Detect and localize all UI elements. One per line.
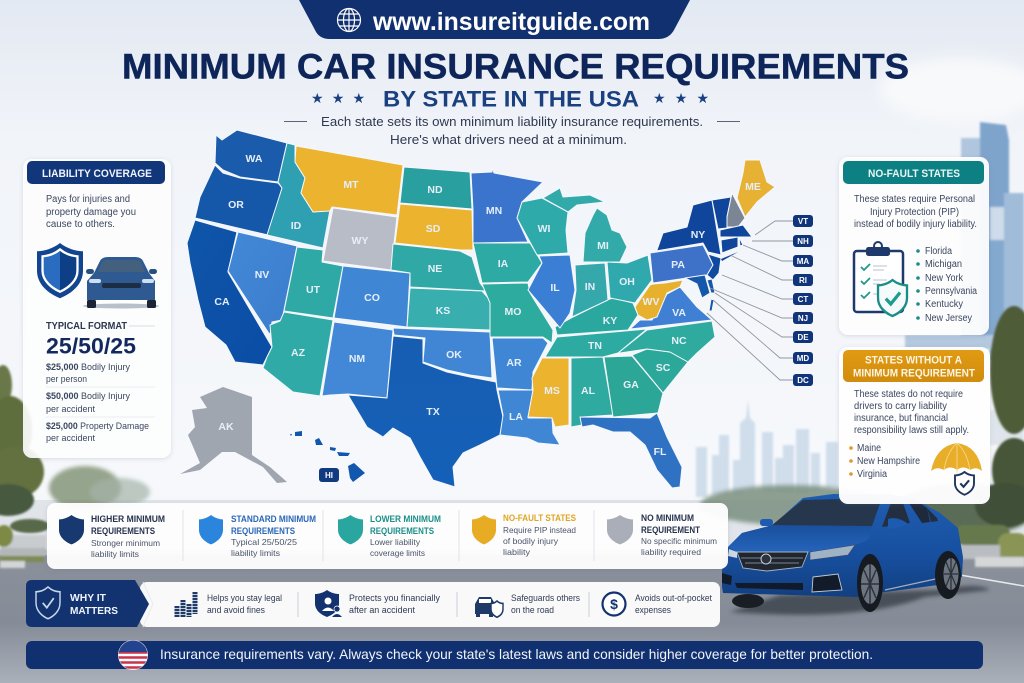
why it matters tab: WHY IT bbox=[70, 592, 107, 604]
state: Pennsylvania bbox=[650, 245, 713, 283]
description: Pays for injuries and bbox=[46, 194, 130, 205]
state: Arkansas bbox=[492, 338, 548, 390]
state: Wisconsin bbox=[517, 198, 568, 255]
state: Montana: MT bbox=[343, 179, 359, 191]
legend: no minimum: No specific minimum bbox=[641, 536, 717, 546]
state: Arizona: AZ bbox=[291, 347, 306, 359]
icon: shield bbox=[37, 243, 83, 298]
legend: lower minimum: LOWER MINIMUM bbox=[370, 514, 441, 524]
legend: higher minimum: Stronger minimum bbox=[91, 538, 160, 548]
legend: no-fault states bbox=[472, 513, 576, 557]
legend: no-fault states: Require PIP instead bbox=[503, 525, 576, 535]
list of no-fault states: New York bbox=[925, 273, 964, 284]
state: Kansas: KS bbox=[436, 305, 450, 317]
list of no-fault states bbox=[916, 246, 977, 324]
icon: car front bbox=[83, 257, 159, 308]
icon: clipboard with shield bbox=[854, 242, 907, 316]
state: Virginia bbox=[630, 287, 712, 329]
state: Arizona bbox=[263, 312, 333, 396]
state: Maryland and Delaware bbox=[685, 275, 715, 311]
list of no-fault states: New Jersey bbox=[925, 313, 972, 324]
benefit: stay legal bbox=[177, 592, 282, 617]
state: Alaska: AK bbox=[218, 421, 234, 433]
coverage amounts: $25,000 Bodily Injury bbox=[46, 362, 130, 373]
coverage amounts: $50,000 Bodily Injury bbox=[46, 391, 130, 402]
northeast state callout labels bbox=[707, 215, 813, 386]
state: Louisiana bbox=[498, 390, 560, 445]
northeast state callout labels: DC bbox=[797, 376, 809, 385]
state: Florida bbox=[580, 413, 682, 488]
state: West Virginia bbox=[635, 280, 683, 320]
northeast state callout labels: MD bbox=[797, 354, 809, 363]
legend: no minimum: NO MINIMUM bbox=[641, 513, 694, 523]
state: Idaho: ID bbox=[291, 220, 302, 232]
state: New Mexico bbox=[322, 322, 393, 398]
bottom note bar bbox=[26, 640, 983, 670]
typical format heading: TYPICAL FORMAT bbox=[46, 320, 128, 332]
list of no-fault states: Pennsylvania bbox=[925, 286, 977, 297]
description: instead of bodily injury liability. bbox=[854, 219, 977, 230]
state: Colorado bbox=[334, 266, 410, 327]
panel: why it matters bbox=[26, 580, 720, 627]
legend: standard minimum: liability limits bbox=[231, 548, 280, 558]
bottom note bar: Insurance requirements vary. Always check your state's latest laws and consider higher coverage for better protection. bbox=[160, 646, 873, 662]
state: Vermont bbox=[712, 197, 731, 229]
state: Iowa bbox=[473, 243, 542, 283]
panel heading: STATES WITHOUT A bbox=[865, 354, 962, 366]
state: Arkansas: AR bbox=[506, 357, 522, 369]
description: These states require Personal bbox=[854, 194, 975, 205]
northeast state callout labels: NJ bbox=[798, 314, 808, 323]
state: Mississippi: MS bbox=[544, 385, 560, 397]
state: Wisconsin: WI bbox=[538, 223, 550, 235]
state: Minnesota: MN bbox=[486, 205, 502, 217]
state: North Dakota: ND bbox=[427, 184, 443, 196]
why it matters tab bbox=[26, 580, 153, 627]
state: Washington bbox=[215, 130, 287, 182]
northeast state callout labels: MA bbox=[797, 257, 809, 266]
state: Washington: WA bbox=[246, 153, 263, 165]
state: Kansas bbox=[407, 288, 490, 330]
benefit: financial protection: after an accident bbox=[349, 605, 415, 615]
state: Illinois: IL bbox=[550, 282, 560, 294]
benefit: out-of-pocket: expenses bbox=[635, 605, 671, 615]
state: Nevada bbox=[228, 232, 297, 335]
panel: map legend bbox=[47, 503, 728, 569]
panel heading bbox=[27, 161, 165, 184]
state: Missouri bbox=[482, 283, 553, 343]
benefit: financial protection bbox=[315, 590, 440, 617]
state: Georgia: GA bbox=[623, 379, 639, 391]
legend: standard minimum: STANDARD MINIMUM bbox=[231, 514, 316, 524]
state: Rhode Island bbox=[739, 237, 743, 246]
why it matters tab: MATTERS bbox=[70, 605, 118, 617]
state: Utah: UT bbox=[306, 284, 321, 296]
benefit: stay legal: and avoid fines bbox=[207, 605, 265, 615]
description: property damage you bbox=[46, 207, 136, 218]
legend: higher minimum: HIGHER MINIMUM bbox=[91, 514, 165, 524]
panel heading bbox=[843, 350, 984, 382]
state: California bbox=[187, 220, 272, 365]
legend: standard minimum bbox=[199, 514, 316, 558]
icon: US flag bbox=[118, 640, 148, 670]
title: MINIMUM CAR INSURANCE REQUIREMENTS bbox=[122, 48, 909, 86]
coverage amounts: per accident bbox=[46, 433, 95, 444]
state: Nevada: NV bbox=[255, 269, 269, 281]
coverage amounts bbox=[46, 362, 155, 444]
state: Florida: FL bbox=[654, 446, 667, 458]
description: cause to others. bbox=[46, 219, 115, 230]
state: Massachusetts bbox=[720, 225, 752, 237]
state: Kentucky bbox=[555, 298, 638, 335]
panel heading bbox=[843, 161, 984, 184]
subtitle with stars: ★★★ bbox=[311, 90, 365, 106]
state: Ohio: OH bbox=[619, 276, 635, 288]
state: Minnesota bbox=[471, 167, 543, 243]
subtitle with stars: BY STATE IN THE USA bbox=[383, 86, 639, 112]
state: Maine: ME bbox=[745, 181, 761, 193]
panel heading: MINIMUM REQUIREMENT bbox=[853, 368, 975, 380]
state: Oklahoma bbox=[393, 328, 492, 378]
northeast state callout labels: RI bbox=[799, 276, 807, 285]
state: Alabama bbox=[571, 357, 613, 427]
list of no-fault states: Kentucky bbox=[925, 299, 963, 310]
state: Nebraska bbox=[391, 244, 486, 291]
state: South Carolina bbox=[632, 349, 688, 393]
benefit: safeguards others bbox=[475, 593, 580, 617]
icon: umbrella with shield bbox=[931, 443, 982, 495]
list of states bbox=[849, 443, 920, 480]
legend: higher minimum: liability limits bbox=[91, 549, 139, 559]
state: Wyoming: WY bbox=[352, 235, 368, 247]
description: responsibility laws still apply. bbox=[854, 425, 969, 436]
typical format value: 25/50/25 bbox=[46, 334, 136, 358]
legend: lower minimum: Lower liability bbox=[370, 537, 421, 547]
coverage amounts: $25,000 Property Damage bbox=[46, 421, 149, 432]
state: Texas: TX bbox=[426, 406, 440, 418]
northeast state callout labels: CT bbox=[798, 295, 808, 304]
state: North Carolina: NC bbox=[671, 335, 687, 347]
state: Tennessee bbox=[545, 329, 647, 357]
US map bbox=[180, 130, 775, 488]
benefit: out-of-pocket: $ bbox=[610, 596, 618, 612]
state: Connecticut bbox=[721, 237, 738, 253]
intro text: Each state sets its own minimum liability insurance requirements. bbox=[321, 114, 703, 129]
legend: standard minimum: Typical 25/50/25 bbox=[231, 537, 297, 547]
state: Tennessee: TN bbox=[588, 340, 602, 352]
state: Idaho bbox=[267, 143, 330, 248]
state: Louisiana: LA bbox=[509, 411, 523, 423]
description: drivers to carry liability bbox=[854, 401, 947, 412]
state: Oregon: OR bbox=[228, 199, 244, 211]
state: Indiana bbox=[572, 263, 608, 317]
state: South Carolina: SC bbox=[656, 362, 671, 374]
state: Hawaii: HI bbox=[325, 471, 333, 480]
state: Utah bbox=[284, 247, 343, 318]
panel: liability coverage bbox=[23, 159, 171, 458]
top banner with website address: www.insureitguide.com bbox=[372, 8, 650, 36]
state: Nebraska: NE bbox=[428, 263, 442, 275]
state: California: CA bbox=[214, 296, 230, 308]
list of states: Virginia bbox=[857, 469, 887, 480]
state: New York bbox=[650, 200, 721, 255]
state: Ohio bbox=[607, 255, 652, 303]
legend: no minimum: REQUIREMENT bbox=[641, 525, 700, 535]
state: Long Island bbox=[721, 252, 738, 261]
panel heading: NO-FAULT STATES bbox=[868, 168, 960, 180]
state: Georgia bbox=[604, 356, 663, 417]
state: New Hampshire bbox=[727, 193, 745, 227]
state: Mississippi bbox=[528, 358, 569, 427]
benefit: financial protection: Protects you financially bbox=[349, 593, 440, 603]
intro text: Here's what drivers need at a minimum. bbox=[390, 132, 627, 147]
state: Wyoming bbox=[323, 208, 397, 270]
state: South Dakota: SD bbox=[426, 223, 441, 235]
state: Michigan: MI bbox=[597, 240, 609, 252]
list of states: New Hampshire bbox=[857, 456, 920, 467]
list of states: Maine bbox=[857, 443, 881, 454]
coverage amounts: per accident bbox=[46, 404, 95, 415]
legend: higher minimum: REQUIREMENTS bbox=[91, 526, 155, 536]
state: South Dakota bbox=[395, 204, 473, 250]
description bbox=[854, 389, 969, 436]
state: New Jersey bbox=[707, 254, 721, 280]
coverage amounts: per person bbox=[46, 374, 87, 385]
description: Injury Protection (PIP) bbox=[870, 207, 959, 218]
state: Michigan bbox=[543, 188, 627, 262]
car bbox=[722, 494, 990, 615]
state: Alaska bbox=[180, 387, 287, 483]
state: Hawaii bbox=[290, 431, 365, 482]
icon: globe bbox=[338, 8, 360, 32]
state: Iowa: IA bbox=[498, 258, 509, 270]
state: Alabama: AL bbox=[581, 385, 596, 397]
state: Virginia: VA bbox=[672, 307, 686, 319]
legend: no minimum: liability required bbox=[641, 547, 701, 557]
state: Montana bbox=[295, 146, 403, 215]
list of no-fault states: Michigan bbox=[925, 259, 962, 270]
state: West Virginia: WV bbox=[643, 296, 659, 308]
state: Colorado: CO bbox=[364, 292, 380, 304]
list of no-fault states: Florida bbox=[925, 246, 952, 257]
description bbox=[46, 194, 136, 230]
state: New Mexico: NM bbox=[349, 353, 365, 365]
description: insurance, but financial bbox=[854, 413, 948, 424]
panel: no-fault states bbox=[839, 157, 989, 335]
benefit: out-of-pocket: Avoids out-of-pocket bbox=[635, 593, 712, 603]
state: Oregon bbox=[195, 165, 282, 235]
subtitle with stars bbox=[311, 86, 709, 112]
state: Indiana: IN bbox=[585, 281, 595, 293]
legend: lower minimum bbox=[338, 514, 441, 558]
northeast state callout labels: NH bbox=[797, 237, 809, 246]
legend: lower minimum: coverage limits bbox=[370, 548, 425, 558]
northeast state callout labels: DE bbox=[797, 333, 809, 342]
legend: no-fault states: of bodily injury bbox=[503, 536, 559, 546]
benefit: safeguards others: on the road bbox=[511, 605, 554, 615]
legend: no minimum bbox=[607, 513, 717, 557]
state: North Dakota bbox=[400, 167, 472, 209]
intro text bbox=[284, 114, 740, 147]
legend: lower minimum: REQUIREMENTS bbox=[370, 526, 434, 536]
legend: no-fault states: NO-FAULT STATES bbox=[503, 513, 576, 523]
panel heading: LIABILITY COVERAGE bbox=[42, 168, 152, 180]
northeast state callout labels: VT bbox=[798, 217, 808, 226]
state: Texas bbox=[348, 336, 503, 487]
state: North Carolina bbox=[618, 321, 715, 362]
state: Kentucky: KY bbox=[603, 315, 617, 327]
state: Missouri: MO bbox=[505, 306, 521, 318]
legend: standard minimum: REQUIREMENTS bbox=[231, 526, 295, 536]
state: Maine bbox=[737, 160, 775, 217]
legend: higher minimum bbox=[59, 514, 165, 559]
benefit: stay legal: Helps you stay legal bbox=[207, 593, 282, 603]
description: These states do not require bbox=[854, 389, 963, 400]
panel: states without a minimum requirement bbox=[839, 347, 990, 504]
state: Pennsylvania: PA bbox=[671, 259, 685, 271]
state: New York: NY bbox=[691, 229, 705, 241]
description bbox=[854, 194, 977, 230]
legend: no-fault states: liability bbox=[503, 547, 531, 557]
state: Oklahoma: OK bbox=[446, 349, 462, 361]
benefit: safeguards others: Safeguards others bbox=[511, 593, 580, 603]
top banner with website address bbox=[299, 0, 690, 39]
subtitle with stars: ★★★ bbox=[653, 90, 709, 106]
benefit: out-of-pocket bbox=[602, 592, 712, 616]
state: Illinois bbox=[528, 255, 575, 328]
